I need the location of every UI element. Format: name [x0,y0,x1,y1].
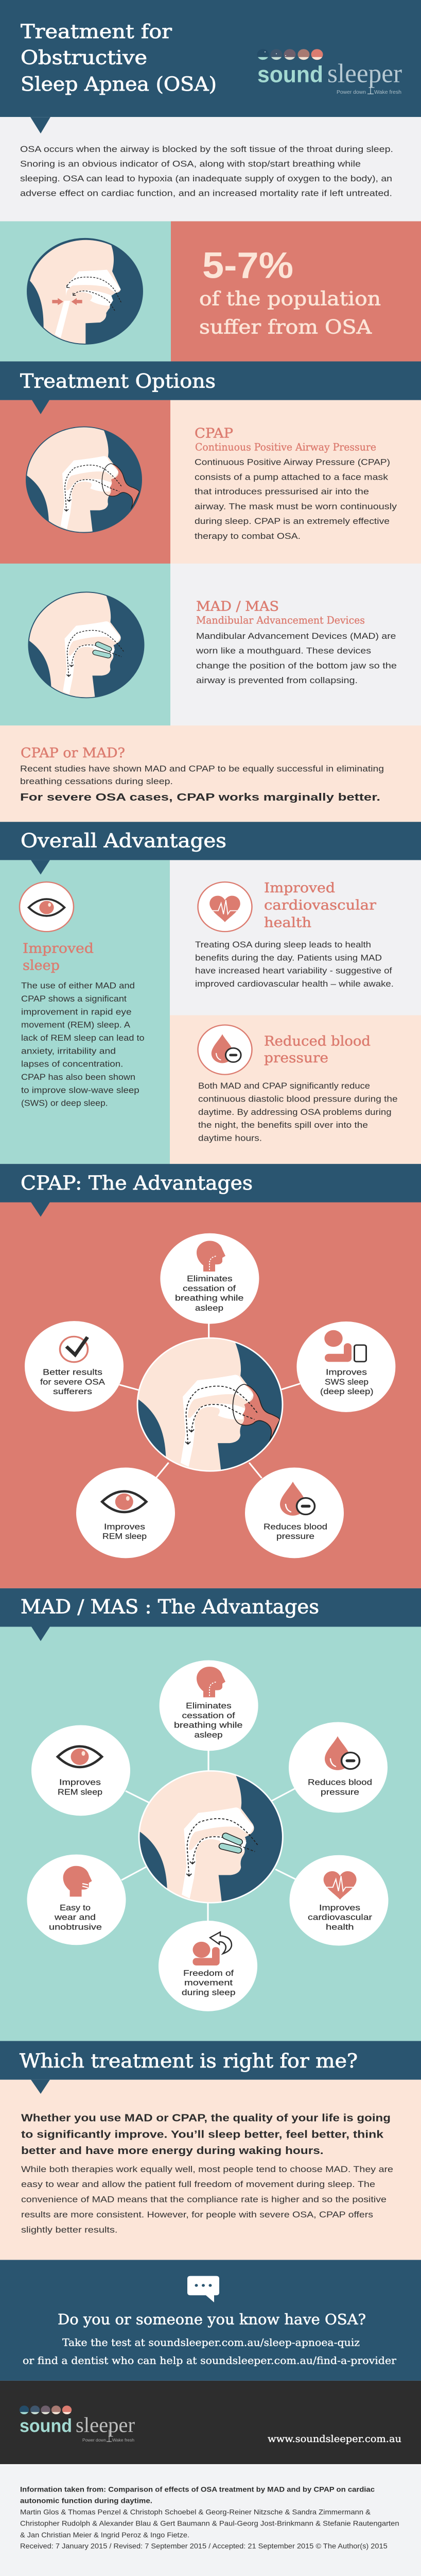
MAD description: airway is prevented from collapsing. [196,675,358,685]
body text: continuous diastolic blood pressure during the [198,1094,398,1104]
bubble: improves SWS sleep: (deep sleep) [320,1387,374,1396]
panel: references [0,2464,421,2575]
authors and dates [20,2509,399,2551]
bubble: reduces blood pressure: Reduces blood [264,1522,327,1531]
body text: results are more consistent. However, for people with severe OSA, CPAP offers [21,2210,373,2219]
CPAP description: that introduces pressurised air into the [195,486,369,497]
heading [264,1032,371,1065]
CPAP description: therapy to combat OSA. [195,531,301,541]
bubble: eliminates cessation [160,1233,259,1324]
MAD description: Mandibular Advancement Devices (MAD) are [196,631,396,641]
section bar: CPAP advantages [0,1164,421,1217]
subheading: Continuous Positive Airway Pressure [195,441,376,453]
logo: sound sleeper: sleeper [327,58,402,88]
bubble: easy to wear: wear and [54,1913,96,1922]
logo: sound sleeper footer: Wake fresh [112,2437,134,2443]
section bar: which treatment [0,2041,421,2094]
bubble: improves REM sleep: REM sleep [102,1532,147,1541]
body text: convenience of MAD means that the compliance rate is higher and so the positive [21,2194,387,2204]
bubble: improves cardiovascular health: Improves [319,1904,360,1912]
bubble: improves cardiovascular health [289,1855,388,1946]
heading: MAD / MAS: MAD / MAS [196,598,279,614]
intro text: adverse effect on cardiac function, and an increased mortality rate if left untreated. [20,188,392,198]
header band [0,0,421,117]
bubble: eliminates cessation: cessation of [183,1284,236,1293]
bubble: improves REM sleep: Improves [59,1778,101,1787]
title: Sleep Apnea (OSA) [21,73,217,95]
heading: health [264,914,311,930]
intro text [20,144,393,198]
bubble: reduces blood pressure: pressure [321,1788,359,1797]
icon: eye badge [20,882,74,931]
panel: CPAP advantages diagram [0,1202,421,1588]
body text: While both therapies work equally well, most people tend to choose MAD. They are [21,2164,393,2174]
body text [21,2164,393,2234]
source title: Information taken from: Comparison of effects of OSA treatment by MAD and by CPAP on cardiac [20,2486,375,2494]
panel: CPAP [0,400,421,564]
heading: CPAP or MAD? [21,744,125,760]
bubble: improves SWS sleep: Improves [326,1368,367,1377]
logo: sound sleeper footer: sleeper [76,2414,135,2437]
bubble: easy to wear: unobtrusive [49,1923,102,1931]
bold statement: Whether you use MAD or CPAP, the quality of your life is going [21,2111,391,2124]
body text: to improve slow-wave sleep [21,1085,139,1095]
body text: easy to wear and allow the patient full freedom of movement during sleep. The [21,2179,375,2189]
comparison text: Recent studies have shown MAD and CPAP to be equally successful in eliminating [20,764,384,773]
icon: blood drop badge [198,1025,252,1075]
MAD description: worn like a mouthguard. These devices [196,646,371,655]
subheading: Mandibular Advancement Devices [196,614,365,626]
section bar: MAD advantages: MAD / MAS : The Advantages [21,1596,319,1618]
source title: autonomic function during daytime. [20,2497,152,2505]
body text: slightly better results. [21,2225,117,2234]
panel: call to action [0,2260,421,2381]
source title [20,2486,375,2505]
bold statement: to significantly improve. You’ll sleep better, feel better, think [21,2128,384,2140]
bubble: eliminates cessation: cessation of [182,1711,235,1720]
stat caption [199,288,381,338]
connector lines [121,1748,295,1923]
heading [264,879,377,930]
stat caption: of the population [199,288,381,310]
header pointer [30,117,50,133]
bubble: eliminates cessation: asleep [195,1303,223,1313]
authors and dates: Received: 7 January 2015 / Revised: 7 September 2015 / Accepted: 21 September 2015 © The Author(s) 2015 [20,2543,388,2551]
centre illustration: CPAP [137,1338,283,1471]
icon: speech bubble [187,2276,219,2302]
heading: Improved [264,879,335,896]
call to action heading: Do you or someone you know have OSA? [58,2311,366,2328]
body text: movement (REM) sleep. A [21,1020,130,1029]
panel: MAD / MAS [0,564,421,725]
bubble: eliminates cessation: breathing while [175,1294,244,1303]
stat caption: suffer from OSA [199,316,372,338]
bubble: eliminates cessation: asleep [195,1731,222,1740]
panel: improved cardiovascular health [170,860,421,1015]
heading: sleep [23,957,60,973]
bubble: easy to wear [27,1854,126,1945]
body text: anxiety, irritability and [21,1046,116,1056]
logo: sound sleeper footer: sound [20,2415,72,2436]
icon: heart badge [198,882,252,931]
bubble: eliminates cessation: Eliminates [187,1275,233,1283]
bold conclusion: For severe OSA cases, CPAP works marginally better. [20,791,380,803]
intro text: OSA occurs when the airway is blocked by the soft tissue of the throat during sleep. [20,144,393,154]
section bar: Overall Advantages: Overall Advantages [21,830,226,852]
heading: Improved [23,940,94,956]
body text: lapses of concentration. [21,1059,123,1069]
body text: (SWS) or deep sleep. [21,1098,108,1108]
section bar: CPAP advantages: CPAP: The Advantages [21,1173,253,1195]
bubble: improves SWS sleep [296,1321,395,1412]
bubble: eliminates cessation: breathing while [174,1721,243,1730]
body text: CPAP has also been shown [21,1072,135,1082]
logo: sound sleeper: sound [257,61,323,87]
bubble: reduces blood pressure: pressure [276,1532,314,1541]
bubble: freedom of movement: movement [184,1978,233,1987]
bubble: freedom of movement: Freedom of [183,1969,234,1978]
bubble: reduces blood pressure: Reduces blood [308,1778,372,1787]
panel: improved sleep [0,860,170,1164]
panel: CPAP or MAD [0,725,421,822]
CPAP description: during sleep. CPAP is an extremely effective [195,516,390,526]
heading: CPAP: CPAP [195,425,233,441]
intro text: Snoring is an obvious indicator of OSA, along with stop/start breathing while [20,159,361,168]
body text: Both MAD and CPAP significantly reduce [198,1081,370,1091]
panel: OSA illustration [0,221,171,361]
heading: cardiovascular [264,897,377,913]
intro panel background [0,117,421,221]
bubble: better results: sufferers [53,1387,92,1396]
bubble: freedom of movement: during sleep [182,1988,236,1997]
authors and dates: & Jan Christian Meier & Ingrid Peroz & Ingo Fietze. [20,2531,189,2539]
heading: pressure [264,1049,328,1065]
MAD description [196,631,397,685]
connector lines [119,1321,300,1478]
bubble: improves REM sleep: Improves [104,1522,145,1531]
authors and dates: Martin Glos & Thomas Penzel & Christoph Schoebel & Georg-Reiner Nitzsche & Sandra Zimmermann & [20,2509,371,2516]
CPAP description: Continuous Positive Airway Pressure (CPAP) [195,457,390,467]
icon: blocked airway head [27,239,143,344]
logo: sound sleeper footer: Power down [82,2437,106,2443]
bubble: easy to wear: Easy to [60,1904,91,1912]
bubble: improves cardiovascular health: health [326,1923,354,1931]
body text: improved cardiovascular health – while awake. [195,979,394,989]
panel: which treatment [0,2080,421,2260]
comparison text: breathing cessations during sleep. [20,776,173,786]
CPAP description [195,457,397,541]
title [21,21,217,95]
body text [198,1081,398,1143]
bubble: improves REM sleep [76,1468,175,1558]
heading [23,940,94,973]
logo: sound sleeper: Wake fresh [374,90,401,95]
logo: sound sleeper: Power down [337,90,366,95]
body text: daytime hours. [198,1133,262,1143]
section bar: Overall Advantages [0,822,421,875]
call to action links: Take the test at soundsleeper.com.au/sleep-apnoea-quiz [62,2336,360,2348]
bold statement [21,2111,391,2157]
bubble: eliminates cessation [160,1660,258,1751]
authors and dates: Christopher Rudolph & Alexander Blau & Gert Baumann & Paul-Georg Jost-Brinkmann & Stefanie Rautengarten [20,2520,399,2528]
bubble: improves cardiovascular health: cardiovascular [308,1913,373,1922]
body text [21,980,145,1108]
body text: daytime. By addressing OSA problems during [198,1107,392,1117]
website: www.soundsleeper.com.au [268,2433,401,2445]
bubble: better results [25,1321,124,1412]
body text: have increased heart variability - suggestive of [195,965,392,976]
body text: benefits during the day. Patients using MAD [195,953,382,962]
intro text: sleeping. OSA can lead to hypoxia (an inadequate supply of oxygen to the body), an [20,174,392,183]
panel: reduced blood pressure [170,1015,421,1164]
section bar: Treatment Options: Treatment Options [20,370,216,393]
heading: Reduced blood [264,1032,371,1049]
bubble: better results: Better results [43,1368,102,1377]
centre illustration: MAD [139,1771,283,1903]
title: Treatment for [21,21,172,43]
icon: head with mouth guard [29,592,144,698]
body text: improvement in rapid eye [21,1007,132,1016]
CPAP description: consists of a pump attached to a face mask [195,472,388,482]
panel: MAD advantages diagram [0,1627,421,2041]
panel: prevalence stat [171,221,421,361]
bubble: freedom of movement [159,1921,257,2011]
CPAP description: airway. The mask must be worn continuously [195,501,397,511]
call to action links [23,2336,396,2366]
MAD description: change the position of the bottom jaw so the [196,660,397,670]
stat number: 5-7% [202,244,293,286]
bubble: reduces blood pressure [245,1468,344,1558]
body text [195,940,394,989]
title: Obstructive [21,47,147,69]
bubble: better results: for severe OSA [40,1378,105,1386]
panel: footer [0,2381,421,2464]
bubble: improves REM sleep [31,1725,130,1816]
bubble: improves REM sleep: REM sleep [58,1788,102,1797]
section bar: which treatment: Which treatment is right for me? [20,2050,358,2072]
bubble: reduces blood pressure [289,1722,388,1812]
body text: lack of REM sleep can lead to [21,1033,145,1043]
logo: sound sleeper footer [20,2405,135,2443]
section bar: MAD advantages [0,1588,421,1641]
body text: The use of either MAD and [21,980,135,990]
call to action links: or find a dentist who can help at soundsleeper.com.au/find-a-provider [23,2354,396,2366]
comparison text [20,764,384,786]
logo: sound sleeper [257,49,402,95]
bold statement: better and have more energy during waking hours. [21,2144,324,2157]
bubble: eliminates cessation: Eliminates [186,1702,232,1710]
icon: head with CPAP mask [26,427,142,533]
body text: CPAP shows a significant [21,994,127,1004]
body text: the night, the benefits spill over into the [198,1120,368,1130]
section bar: Treatment Options [0,361,421,414]
body text: Treating OSA during sleep leads to health [195,940,371,950]
bubble: improves SWS sleep: SWS sleep [325,1378,369,1387]
